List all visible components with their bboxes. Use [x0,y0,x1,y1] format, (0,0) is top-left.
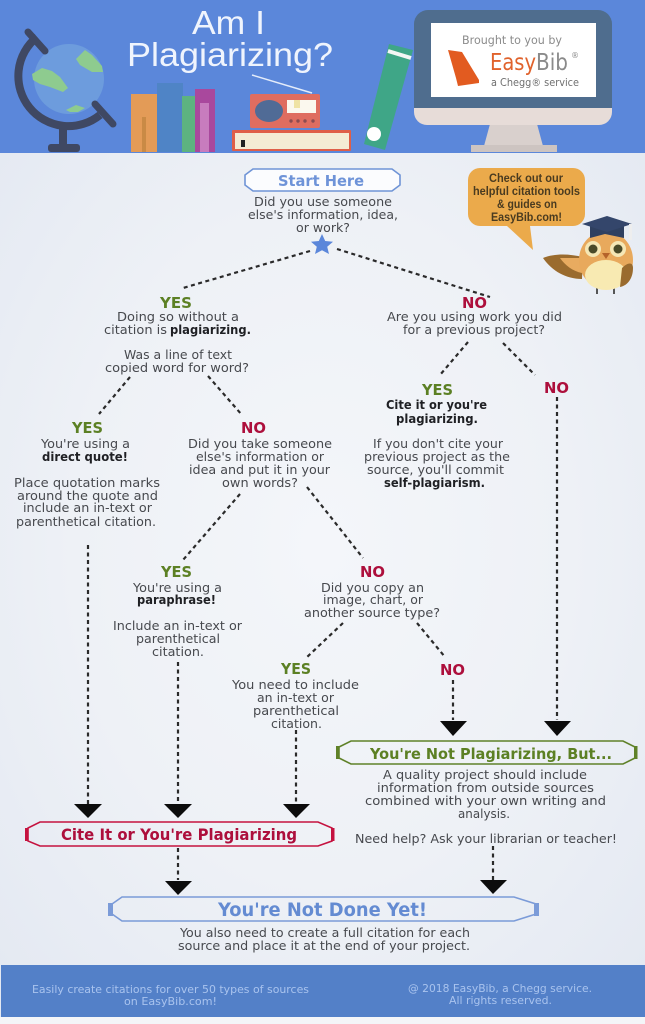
heading: Start Here [245,169,400,191]
icon: globe [18,32,113,152]
text: footer promo [32,983,309,1008]
callout: speech bubble: Check out our [489,173,564,185]
text: first question [248,194,398,235]
text: quality project advice: information from outside sources [377,780,594,795]
banner: Cite It or You're Plagiarizing [25,822,334,846]
text: footer promo: Easily create citations for over 50 types of sources [32,983,309,996]
branch: yes, doing so without a citation: copied word for word? [105,360,249,375]
label: no, not previous work: NO [544,379,569,397]
branch: no, own words: own words? [222,475,298,490]
branch: yes, cite previous work: previous project as the [364,449,510,464]
logo: EasyBib: Easy [490,50,536,76]
branch: yes, paraphrase: Include an in-text or [113,618,243,633]
callout: speech bubble [468,168,585,250]
branch: yes, cite previous work: Cite it or you're [386,397,487,412]
branch: no, previous project [387,294,562,337]
title [127,4,333,73]
branch: yes, direct quote: You're using a [40,436,130,451]
text: quality project advice: analysis. [458,806,510,821]
branch: no, own words: idea and put it in your [189,462,331,477]
branch: yes, cite previous work: self-plagiarism. [384,475,485,490]
branch: yes, paraphrase: paraphrase! [137,592,216,607]
branch: yes, paraphrase: citation. [152,644,204,659]
branch: yes, cite previous work: source, you'll commit [367,462,504,477]
branch: yes, direct quote: around the quote and [17,488,158,503]
logo: EasyBib: ® [571,51,579,60]
panel: footer [1,965,645,1017]
branch: yes, cite previous work: plagiarizing. [396,411,478,426]
branch: yes, doing so without a citation: Doing so without a [117,309,239,324]
panel: header [0,0,645,153]
title: Am I [192,4,265,41]
callout: speech bubble: EasyBib.com! [491,212,562,224]
logo: EasyBib: a Chegg® service [491,76,579,89]
text: quality project advice [355,767,617,846]
branch: yes, direct quote [14,419,160,529]
banner: Cite It or You're Plagiarizing: Cite It or You're Plagiarizing [61,825,297,844]
branch: yes, cite previous work: If you don't cite your [373,436,504,451]
icon: closed book [232,130,351,151]
callout: speech bubble: helpful citation tools [473,186,580,198]
text: quality project advice: combined with your own writing and [365,793,606,808]
logo: EasyBib: Bib [536,50,568,76]
branch: no, own words: NO [241,419,266,437]
icon: radio [250,75,320,128]
branch: yes, doing so without a citation: plagiarizing. [170,322,251,337]
logo: EasyBib [448,33,579,89]
branch: yes, doing so without a citation: YES [159,294,192,312]
text: first question: else's information, idea, [248,207,398,222]
branch: no, previous project: NO [462,294,487,312]
branch: no, copied image: NO [360,563,385,581]
icon: computer monitor [414,10,612,152]
arrows: dashed connectors [88,249,557,880]
banner: You're Not Plagiarizing, But: You're Not Plagiarizing, But... [369,745,612,763]
branch: no, own words: else's information or [196,449,325,464]
branch: yes, paraphrase: parenthetical [136,631,220,646]
branch: yes, direct quote: Place quotation marks [14,475,160,490]
branch: yes, paraphrase: You're using a [132,580,222,595]
icon: owl with graduation cap [543,216,633,294]
banner: You're Not Done Yet [108,897,539,921]
text: full citation advice: You also need to create a full citation for each [179,925,470,940]
text: quality project advice: A quality project should include [383,767,587,782]
arrowheads [74,721,571,895]
branch: yes, doing so without a citation: citation is [104,322,167,337]
branch: yes, doing so without a citation [104,294,251,375]
branch: no, own words [188,419,332,490]
icon: books [131,83,215,152]
branch: yes, cite previous work: YES [421,381,453,399]
branch: no, copied image: image, chart, or [323,592,424,607]
branch: no, previous project: for a previous project? [403,322,545,337]
branch: yes, paraphrase [113,563,243,659]
branch: no, copied image: another source type? [304,605,440,620]
text: copyright: All rights reserved. [449,994,552,1007]
text: copyright [408,982,592,1007]
label: no, did not copy: NO [440,661,465,679]
branch: yes, direct quote: YES [71,419,103,437]
branch: yes, direct quote: direct quote! [42,449,128,464]
banner: You're Not Done Yet: You're Not Done Yet! [217,899,427,921]
icon: star [311,234,333,254]
branch: no, own words: Did you take someone [188,436,332,451]
title: Plagiarizing? [127,36,333,73]
branch: yes, include citation: parenthetical [253,703,339,718]
text: first question: or work? [296,220,350,235]
text: footer promo: on EasyBib.com! [124,995,217,1008]
text: full citation advice [178,925,470,953]
branch: no, previous project: Are you using work you did [387,309,562,324]
text: full citation advice: source and place it at the end of your project. [178,938,470,953]
icon: leaning green book [364,44,413,150]
branch: yes, include citation: an in-text or [257,690,335,705]
branch: yes, paraphrase: YES [160,563,192,581]
branch: yes, include citation: YES [280,660,311,678]
branch: yes, include citation: citation. [271,716,322,731]
text: quality project advice: Need help? Ask your librarian or teacher! [355,831,617,846]
text: copyright: @ 2018 EasyBib, a Chegg service. [408,982,592,995]
branch: yes, doing so without a citation: Was a line of text [124,347,232,362]
branch: no, copied image: Did you copy an [321,580,424,595]
branch: yes, direct quote: include an in-text or [23,500,153,515]
branch: no, copied image [304,563,440,620]
banner: You're Not Plagiarizing, But [336,741,638,764]
heading: Start Here: Start Here [278,172,364,190]
callout: speech bubble: & guides on [497,199,557,211]
branch: yes, cite previous work [364,381,510,490]
branch: yes, direct quote: parenthetical citation. [16,514,156,529]
logo: EasyBib: Brought to you by [462,33,562,47]
branch: yes, include citation [231,660,359,731]
branch: yes, include citation: You need to include [231,677,359,692]
text: first question: Did you use someone [254,194,392,209]
